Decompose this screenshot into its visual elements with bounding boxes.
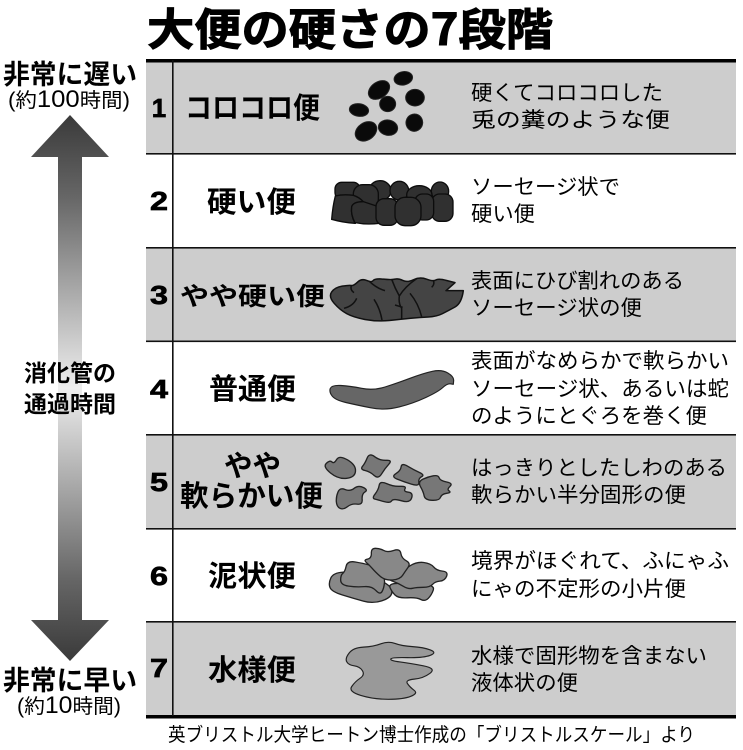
descriptions: 表面にひび割れのある [471, 265, 684, 295]
descriptions: はっきりとしたしわのある [471, 452, 727, 482]
stool type names: やや硬い便 [180, 277, 325, 313]
row numbers: 3 [150, 280, 168, 310]
label: very fast: (約10時間) [17, 690, 121, 719]
icon: type 2 lumpy sausage [332, 181, 453, 226]
label: very fast: 非常に早い [3, 659, 137, 698]
label: digestive transit time: 消化管の [24, 354, 116, 388]
row numbers: 7 [150, 653, 168, 683]
descriptions: 硬くてコロコロした [471, 77, 663, 107]
label: very slow [3, 53, 137, 113]
row numbers: 2 [150, 186, 168, 216]
descriptions: 表面がなめらかで軟らかい [471, 345, 729, 375]
row numbers [150, 93, 169, 683]
descriptions: 境界がほぐれて、ふにゃふ [471, 545, 729, 575]
stool type names: 水様便 [208, 647, 296, 689]
label: very slow: (約100時間) [8, 84, 130, 113]
descriptions: のようにとぐろを巻く便 [471, 400, 707, 430]
label: digestive transit time [24, 354, 116, 419]
stool type names: やや [224, 443, 281, 485]
descriptions: 水様で固形物を含まない [471, 640, 707, 670]
icon: type 1 separate hard lumps [349, 70, 425, 145]
icon: type 7 watery puddle [346, 642, 434, 699]
descriptions: ソーセージ状、あるいは蛇 [471, 373, 729, 403]
stool type names: 軟らかい便 [180, 473, 323, 515]
icon: type 4 smooth sausage [330, 371, 454, 409]
descriptions: ソーセージ状の便 [471, 292, 642, 322]
stool type names: 硬い便 [207, 179, 296, 221]
stool type names: 普通便 [209, 366, 296, 408]
stool type names [180, 85, 325, 689]
row numbers: 1 [152, 93, 166, 123]
arrow: transit time gradient double arrow [31, 115, 109, 661]
icon: type 5 soft blobs [325, 455, 451, 509]
row numbers: 5 [150, 467, 168, 497]
panel: table of seven stool types [146, 59, 736, 718]
descriptions: ソーセージ状で [471, 171, 620, 201]
icon: type 3 cracked sausage [330, 278, 463, 321]
descriptions [471, 77, 729, 697]
label: digestive transit time: 通過時間 [24, 385, 116, 419]
stool type names: コロコロ便 [185, 85, 320, 127]
source note: 英ブリストル大学ヒートン博士作成の「ブリストルスケール」より [168, 720, 695, 747]
descriptions: 液体状の便 [471, 667, 578, 697]
stool type names: 泥状便 [208, 553, 296, 595]
row numbers: 4 [150, 374, 169, 404]
label: very fast [3, 659, 137, 719]
descriptions: 硬い便 [471, 198, 535, 228]
descriptions: 兎の糞のような便 [471, 104, 670, 134]
row numbers: 6 [150, 561, 168, 591]
label: very slow: 非常に遅い [3, 53, 137, 92]
descriptions: にゃの不定形の小片便 [471, 573, 686, 603]
icon: type 6 mushy pieces [329, 548, 447, 602]
descriptions: 軟らかい半分固形の便 [471, 479, 686, 509]
